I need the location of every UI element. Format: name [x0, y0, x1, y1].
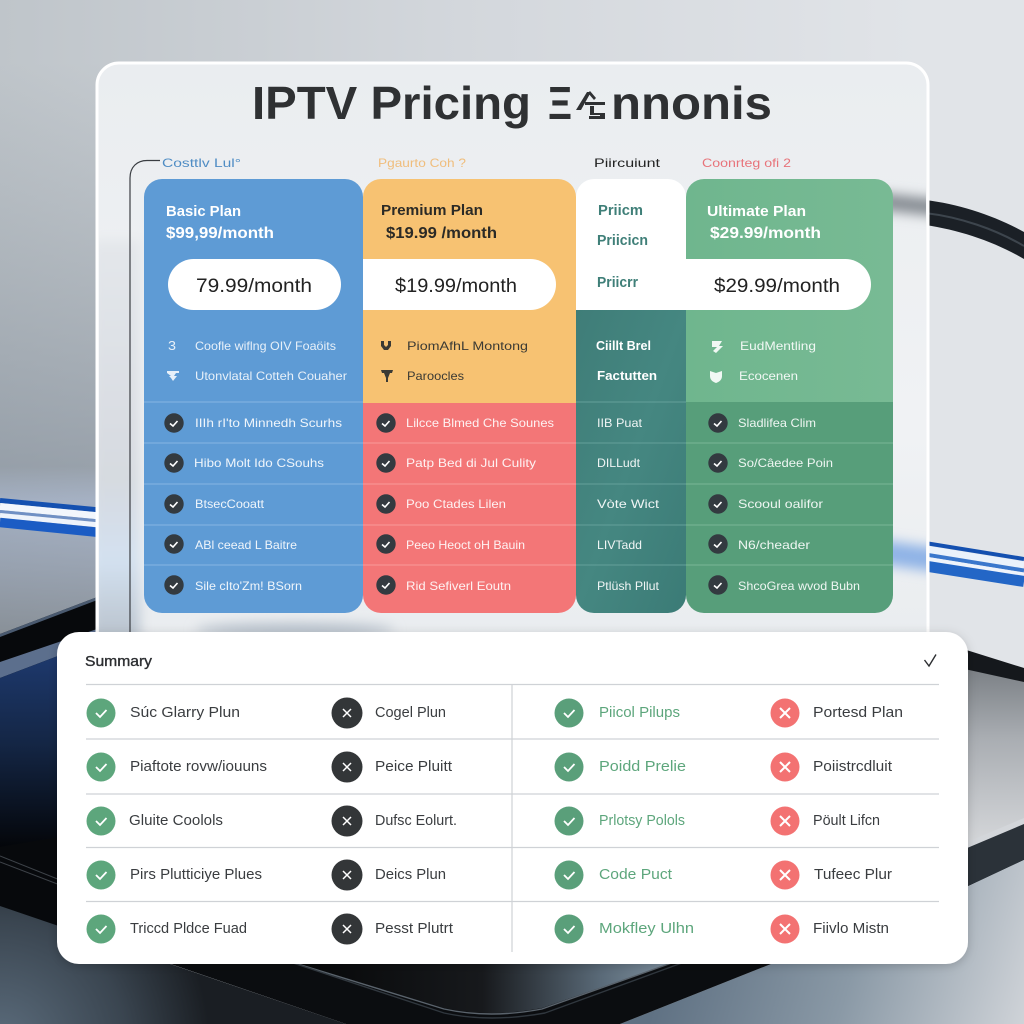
ultimate features: [710, 339, 816, 383]
row 2: Peice Pluitt: [375, 758, 453, 775]
glass blur: right dark cable: [890, 186, 926, 223]
row 3: Prlotsy Polols: [599, 812, 685, 829]
basic plan heading: [166, 204, 274, 242]
pill: basic price: [168, 259, 341, 310]
row 3: [332, 806, 457, 836]
basic row 2: Hibo Molt Ido CSouhs: [194, 456, 324, 470]
pill: basic price: 79.99/month: [196, 276, 312, 297]
row 5: Fiivlo Mistn: [813, 920, 889, 937]
basic row 5: [164, 575, 302, 595]
title: Ξ: [548, 77, 572, 129]
row 3: Gluite Coolols: [129, 812, 223, 829]
panel: basic plan: [144, 179, 363, 613]
device: right body: [620, 648, 1024, 1024]
pill: ultimate price: [576, 259, 871, 310]
summary column 4: [770, 698, 903, 944]
cable: left blue: [0, 500, 100, 532]
glass panel: [90, 63, 945, 667]
row 4: [554, 860, 673, 890]
panel: pricing middle: [576, 179, 686, 613]
cable: right blue: [925, 543, 1024, 582]
pill: ultimate price: $29.99/month: [714, 276, 840, 297]
caption: orange: Pgaurto Coh ?: [378, 156, 466, 170]
summary heading: Summary: [85, 654, 153, 670]
row 4: Code Puct: [599, 866, 673, 883]
title glitch glyph: [576, 91, 605, 119]
row 5: Pesst Plutrt: [375, 920, 454, 937]
row 2: Piaftote rovw/iouuns: [130, 758, 267, 775]
row 3: Pöult Lifcn: [813, 812, 880, 829]
premium features: Paroocles: [407, 369, 464, 383]
middle column list: DILLudt: [597, 456, 641, 470]
basic row 2: [164, 453, 324, 473]
row 5: [86, 914, 247, 944]
middle column features: Factutten: [597, 369, 657, 383]
device: left body: [0, 596, 100, 930]
basic row 5: Sile cIto'Zm! BSorn: [195, 579, 302, 593]
panel: ultimate plan: [686, 179, 893, 613]
middle column labels: Priicrr: [597, 275, 638, 291]
row 5: Triccd Pldce Fuad: [130, 920, 247, 937]
middle column list: [597, 416, 660, 593]
ultimate row 2: So/Câedee Poin: [738, 456, 833, 470]
ultimate plan heading: [707, 204, 821, 242]
premium features: PiomAfhL Montong: [407, 339, 528, 353]
row 3: [770, 806, 880, 836]
row 1: [86, 698, 240, 728]
ultimate plan heading: Ultimate Plan: [707, 204, 806, 220]
title: [252, 77, 772, 129]
middle column list: Vòte Wict: [597, 497, 660, 511]
row 1: [554, 698, 680, 728]
row 4: [770, 860, 892, 890]
premium features: [381, 339, 528, 383]
glass blur: right cable: [893, 534, 926, 578]
cable: right black: [925, 200, 1024, 259]
basic features: [167, 338, 347, 383]
row 1: Portesd Plan: [813, 704, 903, 721]
premium row 4: Peeo Heoct oH Bauin: [406, 538, 525, 552]
premium row 4: [376, 534, 525, 554]
ultimate row 1: [708, 413, 816, 433]
row 1: [770, 698, 903, 728]
basic features: Utonvlatal Cotteh Couaher: [195, 369, 347, 383]
ultimate row 3: Scooul oalifor: [738, 497, 823, 511]
pill: premium price: [363, 259, 556, 310]
ultimate row 3: [708, 494, 823, 514]
caption: blue: Costtlv Lul°: [162, 156, 241, 170]
caption: red: Coonrteg ofi 2: [702, 156, 791, 170]
panel: premium plan: [363, 179, 576, 613]
row 4: Deics Plun: [375, 866, 446, 883]
row 2: [554, 752, 686, 782]
caption: dark: Piircuiunt: [594, 156, 661, 170]
pill: premium price: $19.99/month: [395, 276, 517, 297]
premium row 2: Patp Bed di Jul Culity: [406, 456, 536, 470]
title: nnonis: [611, 77, 772, 129]
premium row 5: Rid Sefiverl Eoutn: [406, 579, 511, 593]
middle column labels: Priicicn: [597, 233, 648, 249]
basic row 4: [164, 534, 297, 554]
row 4: Pirs Plutticiye Plues: [130, 866, 262, 883]
premium plan heading: Premium Plan: [381, 203, 483, 219]
row 1: Súc Glarry Plun: [130, 704, 240, 721]
basic plan heading: $99,99/month: [166, 225, 274, 242]
ultimate row 5: ShcoGrea wvod Bubn: [738, 579, 860, 593]
middle column labels: [597, 203, 648, 291]
row 3: Dufsc Eolurt.: [375, 812, 457, 829]
premium row 2: [376, 453, 536, 473]
row 5: [332, 914, 454, 944]
ultimate plan list: [708, 413, 860, 595]
premium row 3: [376, 494, 506, 514]
summary column 2: [332, 698, 457, 944]
basic row 4: ABl ceead L Baitre: [195, 538, 297, 552]
row 2: [86, 752, 267, 782]
icon: premium feature 1: [381, 341, 391, 350]
title: IPTV Pricing: [252, 77, 531, 129]
basic plan list: [164, 413, 342, 595]
row 2: [332, 752, 453, 782]
bracket line: [130, 160, 160, 632]
summary column 3: [554, 698, 694, 944]
row 2: Poidd Prelie: [599, 758, 686, 775]
icon: basic feature 2: [167, 371, 179, 381]
ultimate row 5: [708, 575, 860, 595]
glass blur: bottom shade: [195, 623, 395, 637]
middle column list: IIB Puat: [597, 416, 643, 430]
row 5: Mokfley Ulhn: [599, 920, 694, 937]
basic row 1: IIIh rI'to Minnedh Scurhs: [195, 416, 342, 430]
icon: premium feature 2: [381, 370, 393, 382]
premium plan heading: $19.99 /month: [386, 225, 497, 242]
row 5: [770, 914, 889, 944]
middle column list: LIVTadd: [597, 538, 642, 552]
basic features: Coofle wiflng OIV Foaöits: [195, 339, 336, 353]
middle column list: Ptlüsh Pllut: [597, 579, 660, 593]
row 3: [554, 806, 685, 836]
row 1: [332, 698, 446, 728]
ultimate row 2: [708, 453, 833, 473]
middle column features: [596, 339, 657, 383]
row 1: Cogel Plun: [375, 704, 446, 721]
glass tint: left: [99, 247, 146, 632]
ultimate features: Ecocenen: [739, 369, 798, 383]
icon: summary check: [924, 654, 936, 666]
premium row 1: Lilcce Blmed Che Sounes: [406, 416, 554, 430]
basic plan heading: Basic Plan: [166, 204, 241, 220]
ultimate row 4: [708, 534, 810, 554]
row 4: Tufeec Plur: [814, 866, 892, 883]
basic row 1: [164, 413, 342, 433]
premium row 1: [376, 413, 554, 433]
basic row 3: BtsecCooatt: [195, 497, 265, 511]
icon: ultimate feature 1: [712, 341, 723, 353]
column captions: [162, 156, 791, 170]
basic row 3: [164, 494, 265, 514]
row 2: [770, 752, 893, 782]
row 3: [86, 806, 223, 836]
middle column labels: Priicm: [598, 203, 643, 219]
summary column 1: [86, 698, 267, 944]
ultimate features: EudMentling: [740, 339, 816, 353]
row 2: Poiistrcdluit: [813, 758, 893, 775]
row 5: [554, 914, 694, 944]
icon: basic feature 1: 3: [168, 338, 176, 353]
premium plan list: [376, 413, 554, 595]
device: bottom corner: [0, 906, 800, 1024]
row 4: [86, 860, 262, 890]
row 1: Piicol Pilups: [599, 704, 680, 721]
ultimate row 1: Sladlifea Clim: [738, 416, 816, 430]
premium plan heading: [381, 203, 497, 242]
middle column features: Ciillt Brel: [596, 339, 651, 353]
icon: ultimate feature 2: [710, 371, 722, 383]
ultimate plan heading: $29.99/month: [710, 225, 821, 242]
premium row 3: Poo Ctades Lilen: [406, 497, 506, 511]
panel: summary: [57, 632, 968, 964]
premium row 5: [376, 575, 511, 595]
row 4: [332, 860, 446, 890]
ultimate row 4: N6/cheader: [738, 538, 810, 552]
